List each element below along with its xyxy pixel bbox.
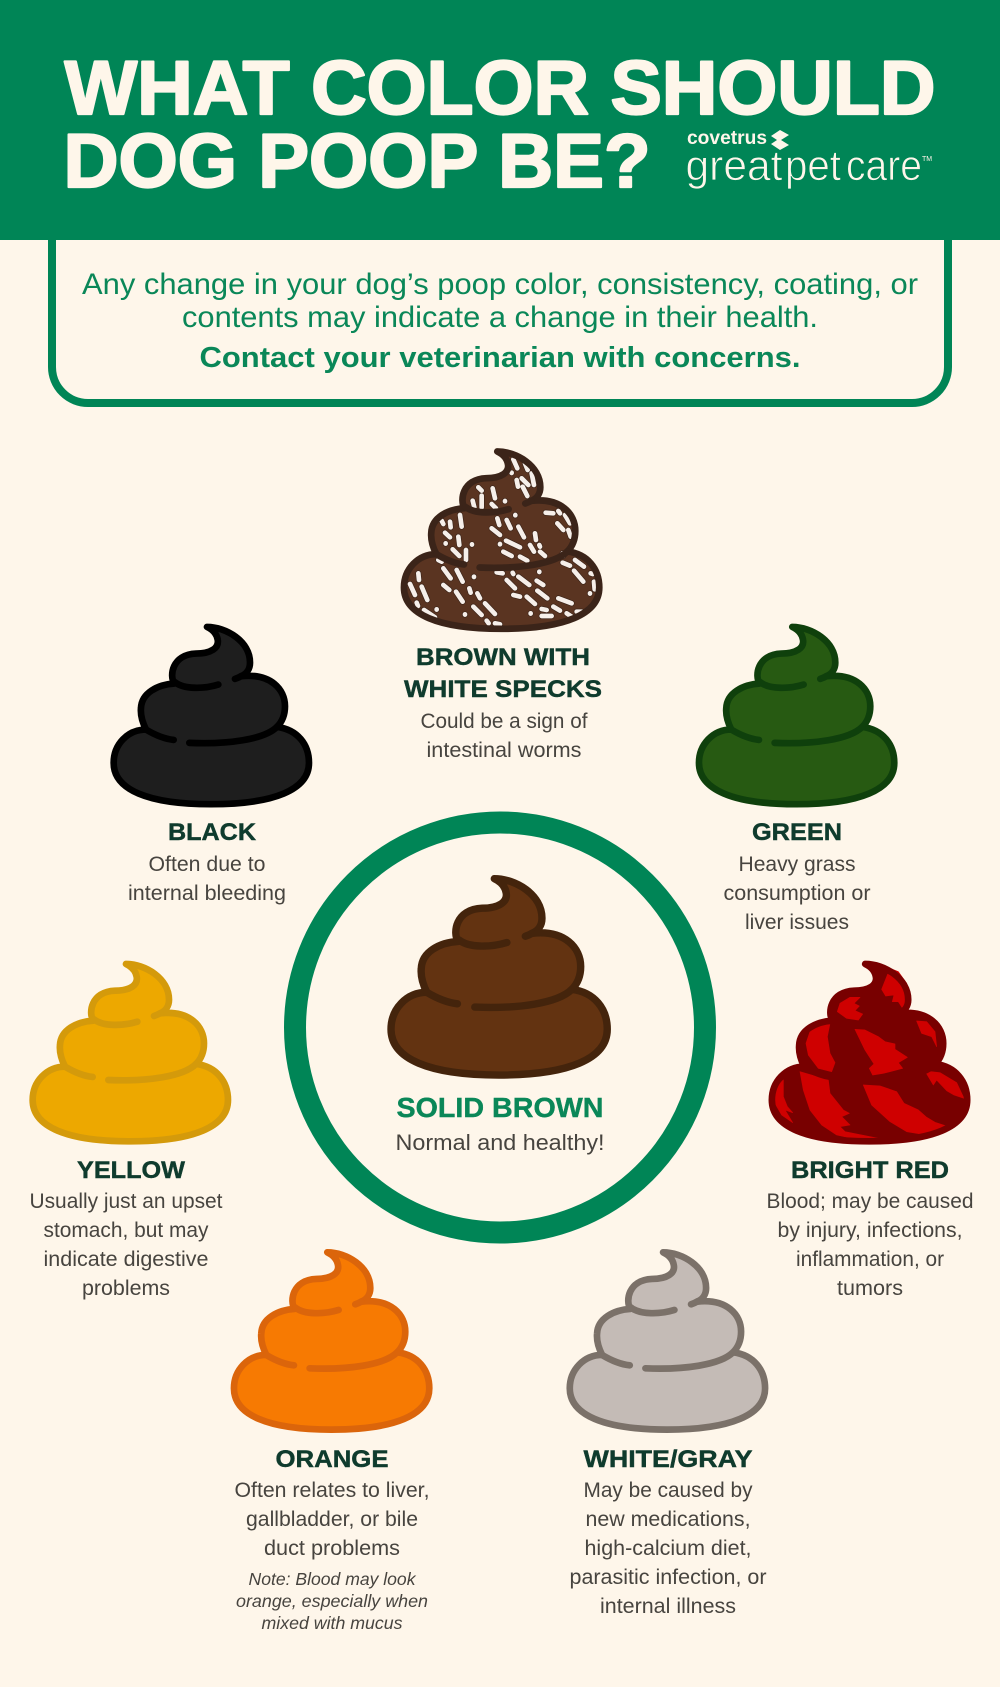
icon: yellow poop	[33, 964, 228, 1141]
description: Often due to	[148, 853, 266, 876]
description: indicate digestive	[44, 1248, 208, 1271]
note: Note: Blood may look	[248, 1569, 417, 1589]
icon: speckled brown poop	[404, 451, 599, 629]
description: high-calcium diet,	[584, 1537, 752, 1560]
intro text: contents may indicate a change in their health.	[182, 301, 818, 334]
description: inflammation, or	[796, 1248, 944, 1271]
heading: ORANGE	[276, 1446, 388, 1473]
description: Usually just an upset	[30, 1190, 223, 1213]
heading: BROWN WITH	[416, 644, 590, 671]
description: internal illness	[600, 1595, 736, 1618]
intro text	[82, 268, 918, 334]
icon: brown poop	[391, 879, 607, 1075]
heading: YELLOW	[77, 1157, 186, 1184]
intro text: Any change in your dog’s poop color, consistency, coating, or	[82, 268, 918, 301]
description: gallbladder, or bile	[246, 1508, 418, 1531]
description: intestinal worms	[426, 739, 582, 762]
note: mixed with mucus	[262, 1613, 403, 1633]
description: Normal and healthy!	[396, 1130, 604, 1155]
heading: BLACK	[168, 819, 256, 846]
logo: covetrus great pet care: great	[686, 142, 783, 190]
note: orange, especially when	[236, 1591, 428, 1611]
heading: WHITE/GRAY	[584, 1446, 752, 1473]
description	[128, 853, 286, 905]
description: stomach, but may	[44, 1219, 209, 1242]
description: duct problems	[264, 1537, 400, 1560]
green ring	[295, 822, 705, 1232]
description: May be caused by	[584, 1479, 753, 1502]
logo: covetrus great pet care: TM	[922, 156, 932, 163]
call to action: Contact your veterinarian with concerns.	[200, 342, 800, 374]
description: problems	[82, 1277, 170, 1300]
icon: green poop	[699, 627, 894, 804]
logo: covetrus great pet care: pet	[785, 142, 841, 190]
description: by injury, infections,	[778, 1219, 962, 1242]
description: new medications,	[586, 1508, 750, 1531]
panel: bright red	[766, 964, 974, 1300]
logo: covetrus great pet care	[686, 128, 932, 190]
description: Blood; may be caused	[766, 1190, 974, 1213]
title: WHAT COLOR SHOULD	[64, 46, 935, 131]
description	[420, 710, 588, 762]
panel: solid brown ring	[295, 822, 705, 1232]
icon: orange poop	[234, 1252, 429, 1430]
icon: gray poop	[570, 1252, 765, 1430]
panel: black	[114, 627, 309, 905]
icon: black poop	[114, 627, 309, 804]
logo: covetrus great pet care: covetrus	[687, 128, 767, 149]
panel: white/gray	[570, 1252, 767, 1618]
description	[30, 1190, 223, 1300]
note	[236, 1569, 428, 1633]
description: Often relates to liver,	[234, 1479, 430, 1502]
description: consumption or	[724, 882, 871, 905]
description: internal bleeding	[128, 882, 286, 905]
intro callout box	[52, 240, 948, 403]
heading: WHITE SPECKS	[404, 676, 602, 703]
description	[234, 1479, 430, 1560]
logo: covetrus great pet care: care	[846, 142, 922, 190]
header band	[0, 0, 1000, 240]
panel: yellow	[30, 964, 228, 1300]
description: Could be a sign of	[420, 710, 588, 733]
description	[570, 1479, 767, 1618]
heading: SOLID BROWN	[396, 1092, 604, 1123]
description	[766, 1190, 974, 1300]
heading: BRIGHT RED	[791, 1157, 949, 1184]
heading: GREEN	[752, 819, 842, 846]
description: Heavy grass	[738, 853, 856, 876]
panel: orange	[234, 1252, 430, 1633]
panel: green	[699, 627, 894, 934]
description: tumors	[837, 1277, 903, 1300]
title: DOG POOP BE?	[64, 119, 650, 204]
panel: brown with white specks	[404, 451, 602, 762]
description	[724, 853, 871, 934]
heading	[404, 644, 602, 703]
icon: red streaked poop	[772, 964, 967, 1141]
description: parasitic infection, or	[570, 1566, 767, 1589]
description: liver issues	[745, 911, 849, 934]
title	[64, 46, 935, 204]
